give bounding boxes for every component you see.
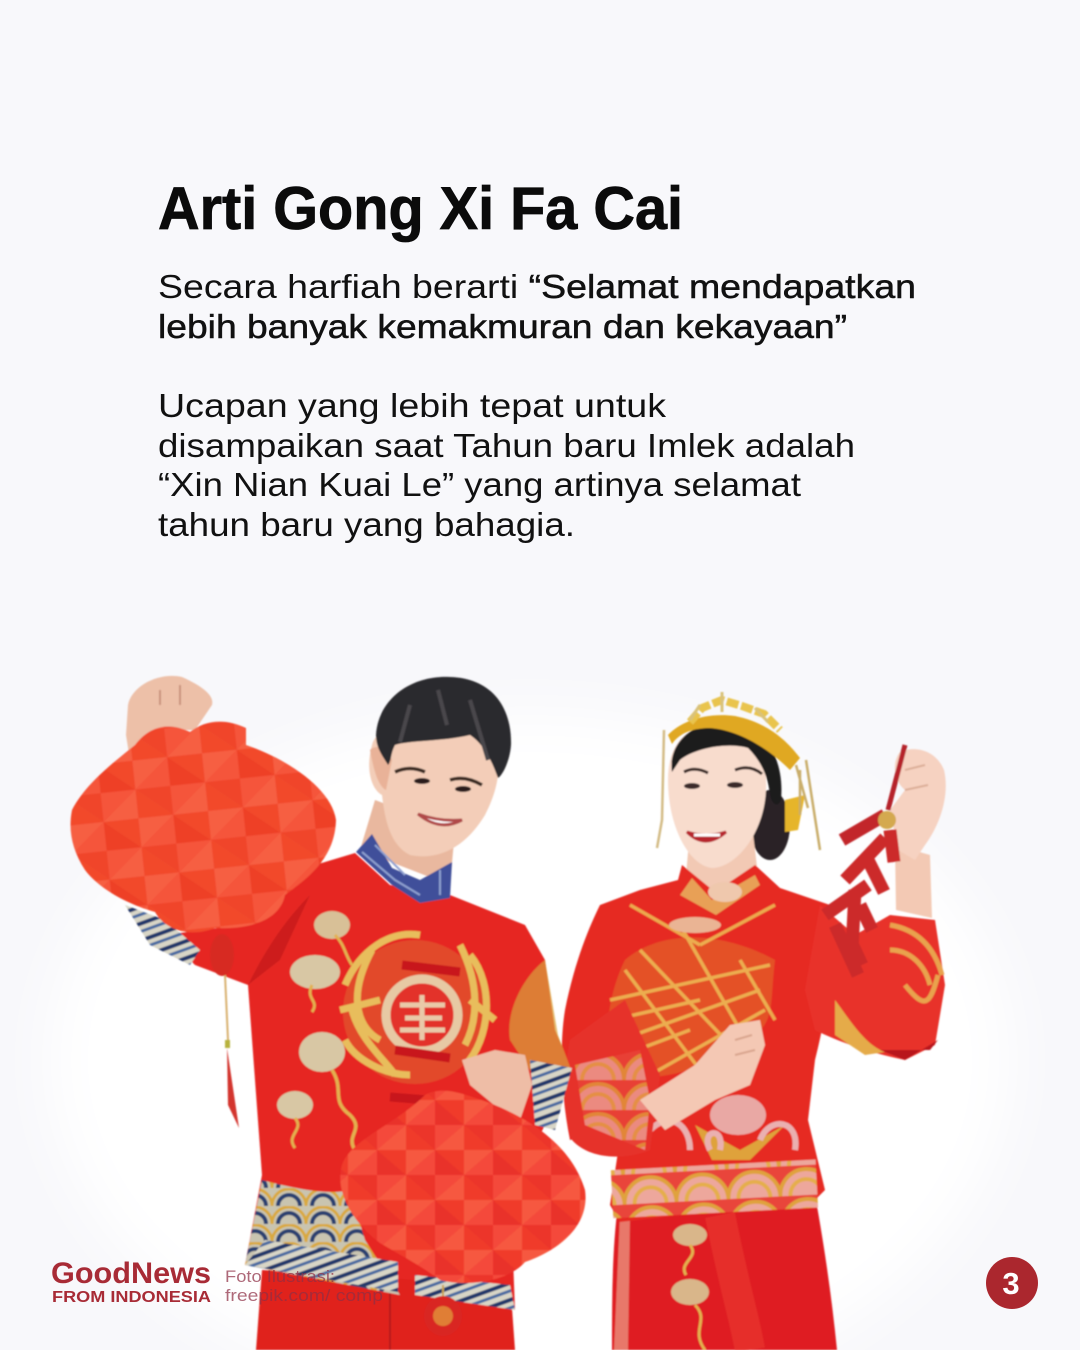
right sleeve embroidery [509,960,572,1130]
right forearm and hand [890,749,946,918]
lantern charm [424,1285,462,1336]
text block: literal meaning: Secara harfiah berarti “Selamat mendapatkan [158,268,916,305]
page number badge [986,1257,1038,1309]
left sleeve cuff [565,1000,660,1157]
neck and face [668,722,781,905]
neck [360,800,455,885]
photo backdrop [50,715,1010,1350]
left sleeve cuff [125,905,200,965]
wave hem [245,1180,515,1310]
infographic canvas [52,184,1038,1350]
right sleeve [805,905,945,1060]
photo credit: Foto Ilustrasi: [225,1268,335,1286]
text block: literal meaning: lebih banyak kemakmuran dan kekayaan” [158,308,847,345]
photo credit [225,1268,383,1305]
hair bun [750,790,790,860]
trousers [256,1270,515,1350]
text block: proper greeting: tahun baru yang bahagia. [158,506,575,543]
blue collar [356,834,452,903]
logo: GoodNews from Indonesia: FROM INDONESIA [52,1289,211,1306]
text block: proper greeting [158,387,855,543]
text block: proper greeting: Ucapan yang lebih tepat untuk [158,387,667,424]
text block: proper greeting: “Xin Nian Kuai Le” yang artinya selamat [158,466,801,503]
tassel [210,934,239,1128]
figure: woman [562,692,946,1350]
title: Arti Gong Xi Fa Cai [158,175,683,242]
small paper lantern [335,1085,595,1290]
large paper lantern [69,720,337,933]
embroidered dragon medallion [340,934,495,1100]
firecrackers [825,745,905,975]
left hand [640,1020,765,1130]
cloud embroideries [277,911,356,1150]
jacket [562,865,832,1222]
figure: man [60,676,595,1350]
logo: GoodNews from Indonesia [51,1257,211,1306]
photo credit: freepik.com/ comp [225,1287,383,1305]
photo: couple in traditional dress [60,676,946,1350]
jacket [165,853,572,1310]
text block: literal meaning [158,268,916,345]
raised hand [126,676,212,760]
gold crown [657,692,820,850]
hair [376,677,511,778]
page number badge: 3 [1002,1266,1020,1301]
skirt [612,1195,837,1350]
face [369,718,498,856]
logo: GoodNews from Indonesia: GoodNews [51,1257,211,1290]
right hand [462,1050,532,1120]
text block: proper greeting: disampaikan saat Tahun baru Imlek adalah [158,427,855,464]
